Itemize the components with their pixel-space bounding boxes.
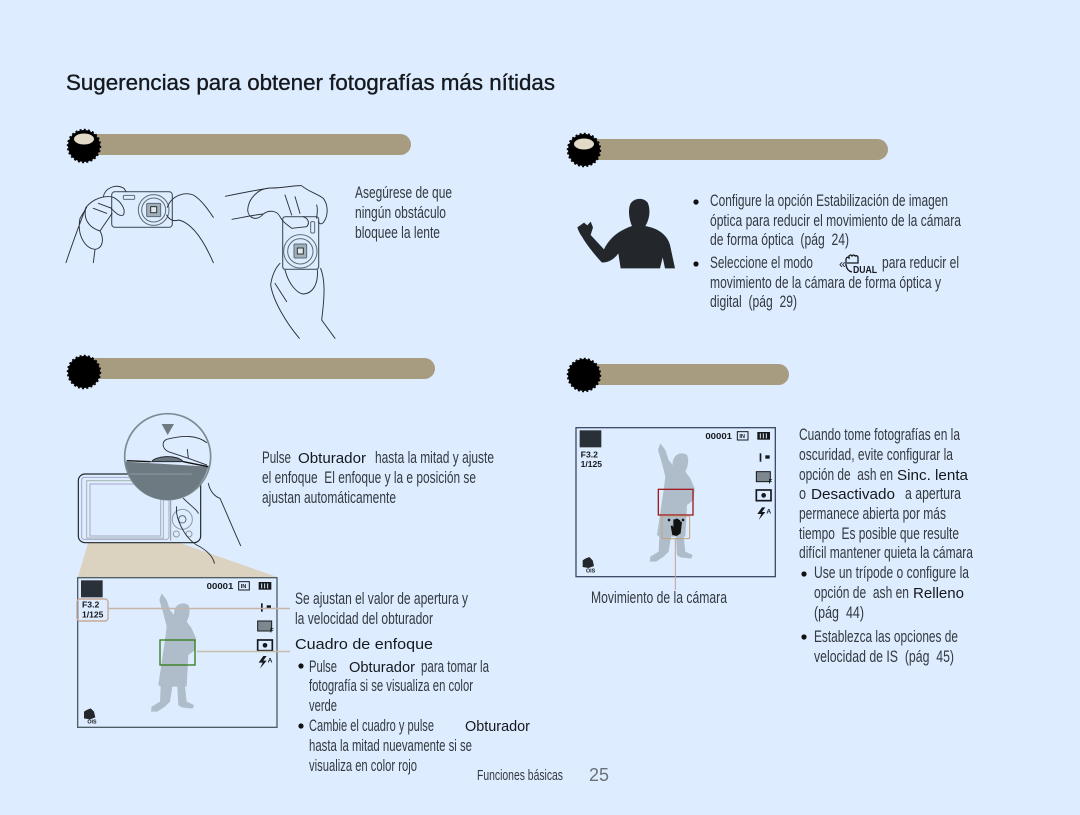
text: low-light advice: opción de ash en [799,466,893,484]
callout: aperture and shutter speed: Se ajustan el valor de apertura y [295,590,469,608]
text: lens reminder [355,184,452,242]
text: stabilization bullets: movimiento de la cámara de forma óptica y [710,274,942,292]
screen: camera display with red focus frame and shake warning [576,428,775,590]
text: low-light advice: o [799,485,806,503]
screen: camera display with green focus frame: IN [241,584,246,590]
screen: camera display with red focus frame and shake warning: A [766,508,771,515]
screen: camera display with green focus frame: F3.2 [82,599,100,609]
heading bar: half-press shutter [68,356,435,388]
footer: section name and page number: 25 [589,765,609,785]
text: low-light advice: Establezca las opciones de [814,628,958,646]
label: camera movement: Movimiento de la cámara [591,589,728,607]
callout: focus frame: Cambie el cuadro y pulse [309,717,434,735]
callout: focus frame: fotografía si se visualiza en color [309,677,473,695]
screen: camera display with red focus frame and shake warning: 1/125 [581,459,602,469]
text: low-light advice: Cuando tome fotografías en la [799,426,961,444]
callout: focus frame: Pulse [309,658,337,676]
screen: camera display with red focus frame and shake warning: IN [739,434,745,440]
callout: focus frame: Obturador [465,718,530,735]
text: low-light advice: permanece abierta por más [799,505,946,523]
text: low-light advice: tiempo Es posible que resulte [799,525,959,543]
callout: focus frame: Cuadro de enfoque [295,636,433,653]
text: low-light advice: a apertura [905,485,962,503]
text: half-press instruction [262,449,494,507]
callout: aperture and shutter speed: la velocidad del obturador [295,610,433,628]
text: stabilization bullets: óptica para reducir el movimiento de la cámara [710,212,962,230]
screen: camera display with red focus frame and shake warning: F3.2 [581,449,598,459]
text: stabilization bullets: para reducir el [882,254,959,272]
text: low-light advice [799,426,974,666]
screen: camera display with red focus frame and shake warning: 00001 [705,431,732,441]
text: low-light advice: Sinc. lenta [897,467,969,484]
callout: focus frame: para tomar la [421,658,490,676]
text: low-light advice: difícil mantener quieta la cámara [799,544,974,562]
text: low-light advice: (pág 44) [814,604,864,622]
screen: camera display with green focus frame: A [268,658,273,665]
icon: dual IS hand: DUAL [853,265,877,276]
icon: person silhouette with thumb up [577,199,675,268]
screen: camera display with green focus frame: OIS [87,719,97,725]
illustration: camera back with zoomed shutter [78,414,241,563]
callout: focus frame: Obturador [349,659,415,676]
highlight: beam from camera to screen [78,543,277,577]
text: half-press instruction: hasta la mitad y ajuste [375,449,494,467]
screen: camera display with green focus frame: 00001 [207,581,234,591]
text: half-press instruction: Obturador [298,450,366,467]
callout: focus frame: hasta la mitad nuevamente si se [309,737,472,755]
text: stabilization bullets: digital (pág 29) [710,293,797,311]
text: low-light advice: Relleno [913,585,964,602]
text: half-press instruction: el enfoque El enfoque y la e posición se [262,469,476,487]
text: half-press instruction: ajustan automáticamente [262,489,396,507]
screen: camera display with green focus frame: 1/125 [82,610,104,620]
text: stabilization bullets [693,192,962,311]
panel: half-press shutter [68,356,530,775]
callout: focus frame: verde [309,697,337,715]
text: low-light advice: velocidad de IS (pág 45) [814,648,954,666]
text: low-light advice: Use un trípode o configure la [814,564,970,582]
icon: dual IS hand [846,255,877,276]
screen: camera display with red focus frame and shake warning: OIS [586,569,596,575]
text: lens reminder: Asegúrese de que [355,184,452,202]
panel: hold the camera [66,130,452,338]
text: lens reminder: ningún obstáculo [355,204,446,222]
panel: low-light shooting [568,358,974,666]
screen: camera display with green focus frame: F [270,629,274,635]
callout: aperture and shutter speed [77,590,469,628]
panel: reduce camera shake [568,134,962,311]
text: low-light advice: opción de ash en [814,584,909,602]
illustration: hands holding camera vertically [225,186,335,338]
heading bar: hold the camera [68,130,411,162]
heading bar: reduce camera shake [568,134,888,166]
text: stabilization bullets: de forma óptica (pág 24) [710,231,849,249]
callout: focus frame: visualiza en color rojo [309,757,417,775]
text: half-press instruction: Pulse [262,449,291,467]
text: low-light advice: Desactivado [811,486,895,503]
text: lens reminder: bloquee la lente [355,224,440,242]
text: stabilization bullets: « [839,257,846,271]
screen: camera display with green focus frame [78,578,277,727]
callout: focus frame [160,636,530,775]
text: low-light advice: oscuridad, evite configurar la [799,446,954,464]
text: stabilization bullets: Seleccione el modo [710,254,813,272]
heading bar: low-light shooting [568,358,789,392]
text: stabilization bullets: Configure la opción Estabilización de imagen [710,192,948,210]
footer: section name and page number: Funciones básicas [477,767,563,784]
illustration: hands holding camera horizontally [66,186,213,263]
screen: camera display with red focus frame and shake warning: F [769,479,773,485]
title: Sugerencias para obtener fotografías más nítidas [66,70,555,95]
